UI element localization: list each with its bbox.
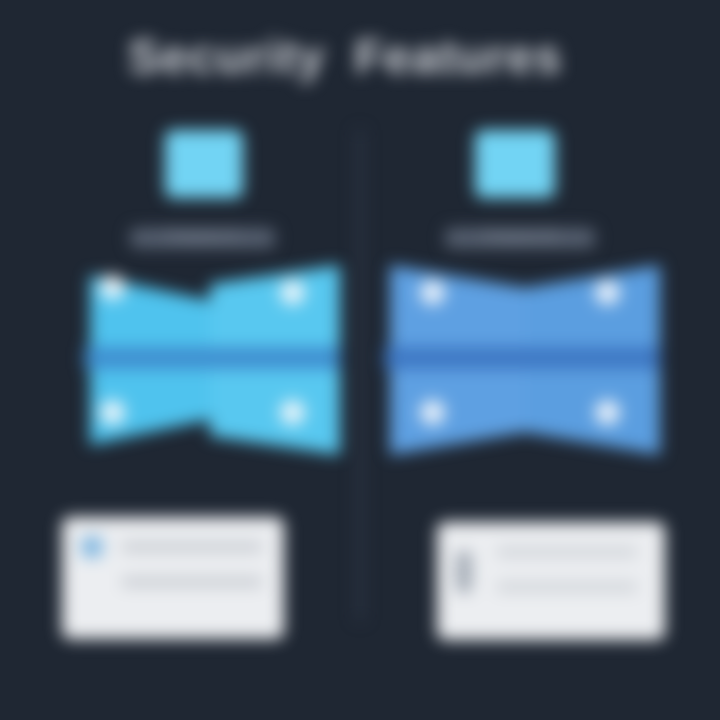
- right label: Feature B: [485, 228, 555, 245]
- panel: right: [374, 117, 678, 653]
- left label: [130, 228, 275, 248]
- left diagram: [74, 254, 352, 466]
- icon: left square: [165, 130, 243, 198]
- title: Security Features: [128, 31, 562, 84]
- right diagram: [374, 254, 672, 466]
- left label: Feature A: [168, 228, 237, 245]
- divider: [357, 130, 363, 620]
- right label: [445, 228, 595, 248]
- panel: left: [49, 117, 352, 652]
- left card: [62, 517, 284, 639]
- right card: [437, 522, 665, 640]
- icon: right square: [475, 130, 555, 198]
